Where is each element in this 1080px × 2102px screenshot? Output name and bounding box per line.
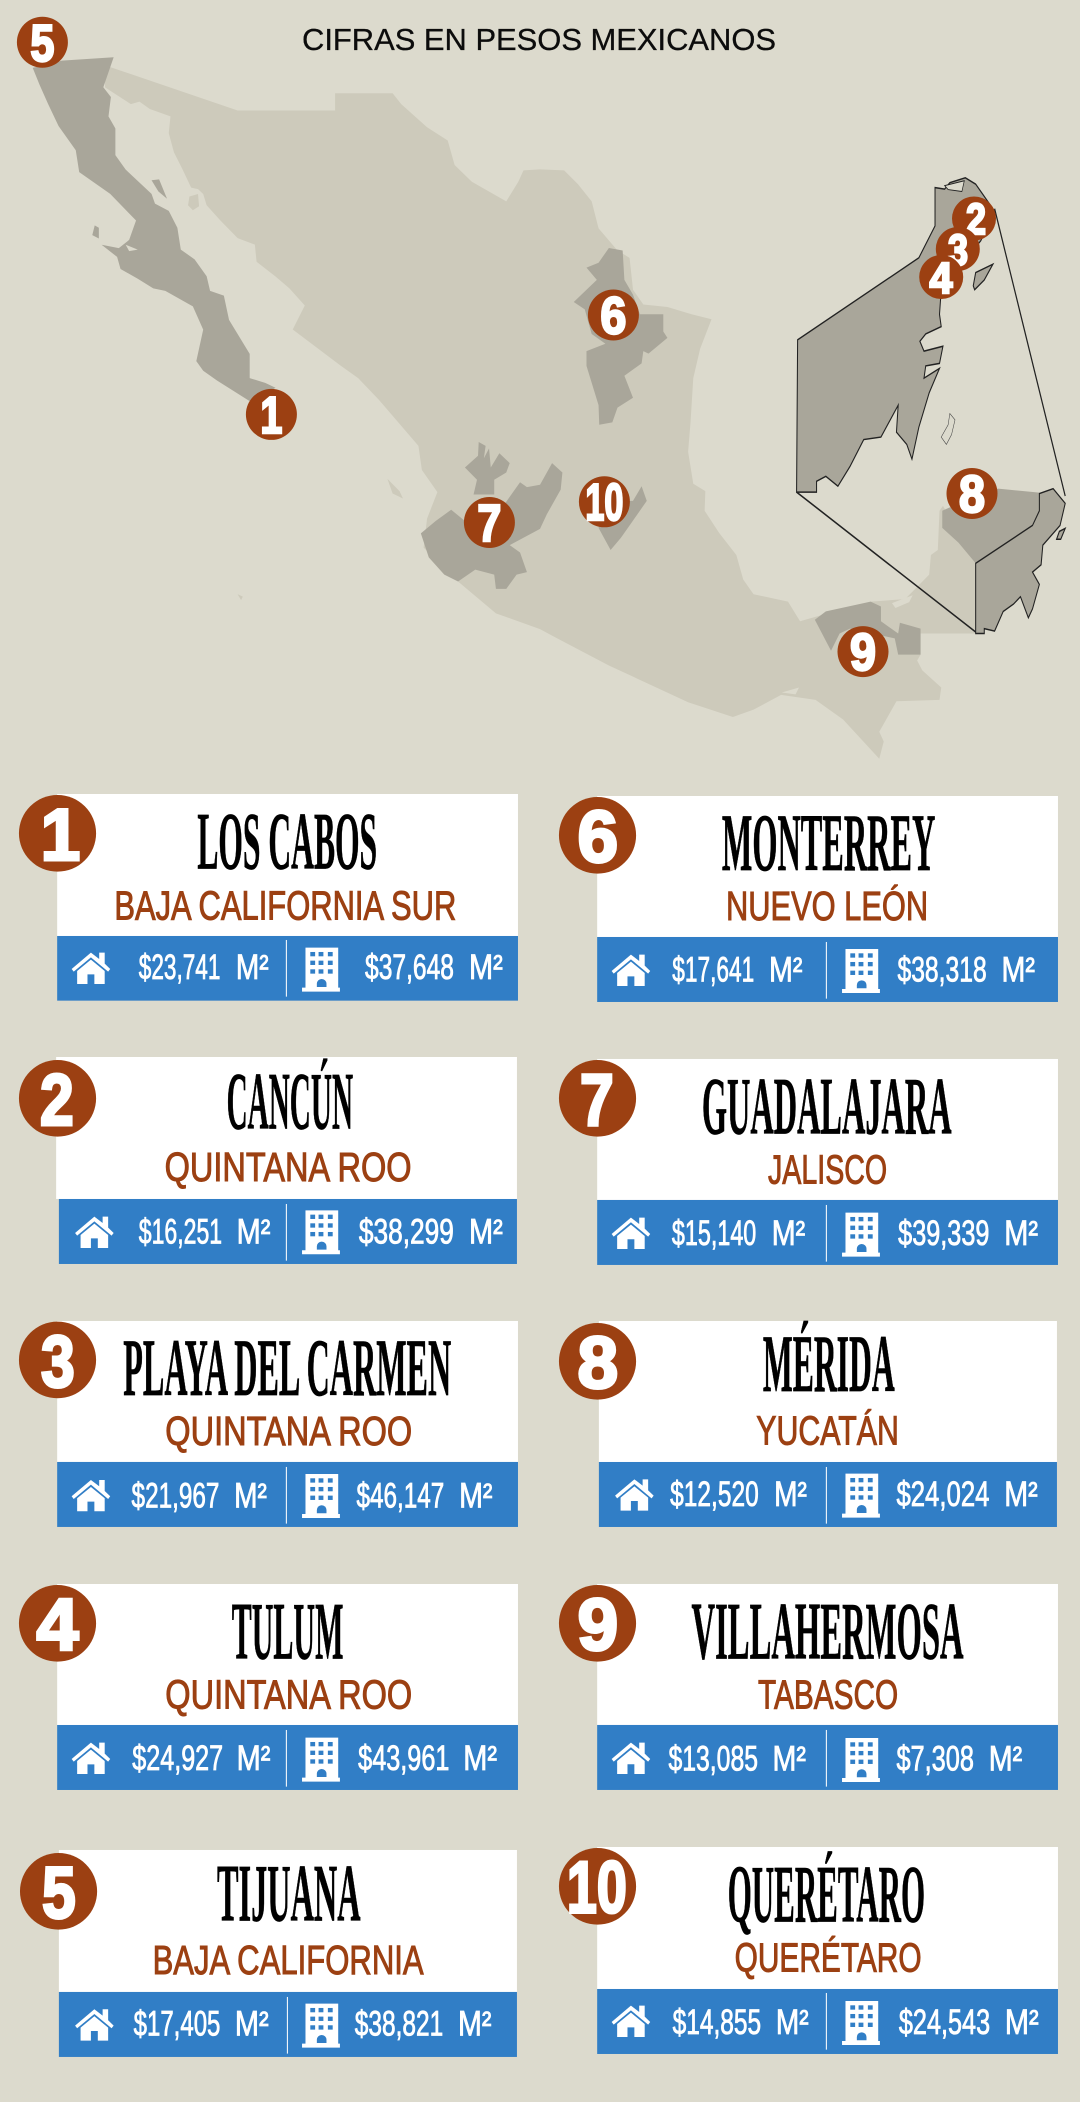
badge 2: [19, 1059, 96, 1141]
badge 7: 7: [580, 1059, 614, 1141]
icon: building: [302, 1210, 340, 1254]
badge 6: 6: [578, 796, 618, 878]
map marker 9: [838, 624, 888, 682]
badge 6: [559, 796, 636, 878]
map of Mexico: [17, 15, 1065, 759]
icon: building: [842, 2001, 880, 2045]
house price: $17,641: [672, 950, 754, 990]
price bar: M²: [1005, 2003, 1039, 2042]
badge 8: [559, 1322, 636, 1404]
state name: JALISCO: [768, 1147, 887, 1192]
price bar: M²: [235, 2004, 269, 2043]
price bar: [597, 937, 1058, 1002]
map marker 6: 6: [600, 288, 626, 346]
price bar: M²: [469, 948, 503, 987]
apartment price: $24,543: [899, 2003, 990, 2042]
house price: $21,967: [132, 1476, 219, 1515]
badge 8: 8: [578, 1322, 618, 1404]
map marker 2: [952, 195, 996, 244]
price bar: M²: [989, 1739, 1022, 1778]
mainland Mexico: [105, 65, 976, 759]
panel: Tijuana: TIJUANA: [217, 1848, 361, 1938]
price bar: M²: [237, 1739, 270, 1778]
badge 3: [19, 1321, 96, 1402]
map marker 9: 9: [850, 624, 876, 682]
price bar: M²: [772, 1739, 806, 1778]
price bar: [57, 1462, 518, 1527]
apartment price: $43,961: [358, 1739, 449, 1778]
house price: $15,140: [672, 1213, 756, 1253]
price bar: [59, 1992, 517, 2057]
icon: house: [612, 955, 650, 986]
icon: house: [72, 1743, 110, 1774]
state name: TABASCO: [758, 1672, 898, 1717]
map marker 10: 10: [585, 474, 623, 532]
price bar: M²: [237, 1212, 270, 1251]
text: PLAYA DEL CARMEN: [123, 1322, 451, 1413]
panel: Villahermosa: [559, 1584, 1058, 1790]
price bar: M²: [458, 2004, 492, 2043]
panel: Mérida: [559, 1318, 1057, 1527]
badge 10: 10: [567, 1846, 627, 1928]
apartment price: $38,821: [355, 2004, 443, 2043]
price bar: M²: [469, 1212, 503, 1251]
house price: $16,251: [139, 1212, 222, 1251]
icon: house: [75, 1217, 114, 1248]
price bar: [59, 1199, 517, 1264]
state name: QUERÉTARO: [735, 1935, 922, 1981]
map marker 4: 4: [930, 254, 953, 303]
price bar: [597, 1200, 1058, 1265]
state name: BAJA CALIFORNIA: [153, 1938, 424, 1983]
map marker 8: 8: [959, 466, 985, 524]
panel: Los Cabos: [19, 794, 518, 1001]
state name: YUCATÁN: [756, 1408, 899, 1453]
house price: $23,741: [139, 948, 220, 987]
badge 5: [20, 1852, 97, 1934]
badge 7: [559, 1059, 636, 1141]
Yucatan state: [942, 489, 1039, 563]
icon: building: [842, 1474, 880, 1518]
panel: Los Cabos: LOS CABOS: [197, 796, 377, 886]
house price: $24,927: [132, 1739, 223, 1778]
state name: QUINTANA ROO: [165, 1145, 412, 1190]
price bar: M²: [463, 1739, 497, 1778]
state name: NUEVO LEÓN: [726, 884, 928, 929]
panel: Tijuana: [20, 1848, 517, 2057]
icon: house: [75, 2009, 114, 2041]
house price: $17,405: [134, 2004, 220, 2043]
price bar: M²: [236, 948, 269, 987]
apartment price: $39,339: [898, 1213, 989, 1253]
house price: $13,085: [668, 1739, 758, 1778]
map marker 10: [579, 474, 630, 532]
price bar: M²: [234, 1476, 267, 1515]
badge 9: [559, 1584, 636, 1666]
house price: $12,520: [670, 1475, 759, 1514]
icon: house: [615, 1479, 654, 1511]
price bar: M²: [459, 1476, 493, 1515]
panel: Playa del Carmen: [19, 1321, 518, 1527]
Baja California highlighted: [33, 57, 276, 402]
state name: BAJA CALIFORNIA SUR: [114, 883, 456, 928]
icon: building: [302, 1738, 340, 1782]
apartment price: $37,648: [365, 948, 454, 987]
icon: house: [612, 1743, 650, 1774]
panel: Querétaro: [559, 1846, 1058, 2054]
map marker 6: [588, 288, 639, 346]
panel: Monterrey: [559, 796, 1058, 1002]
apartment price: $38,299: [359, 1212, 454, 1251]
panel: Guadalajara: [559, 1059, 1058, 1265]
badge 3: 3: [41, 1321, 75, 1402]
price bar: [599, 1462, 1057, 1527]
map marker 7: 7: [477, 495, 501, 553]
Jalisco highlighted: [421, 442, 562, 589]
map marker 8: [946, 466, 998, 524]
apartment price: $24,024: [896, 1475, 989, 1514]
connector lines: [797, 209, 1065, 632]
map marker 5: [17, 15, 68, 73]
price bar: M²: [772, 1213, 805, 1253]
panel: Tulum: [19, 1584, 518, 1790]
panel: Tulum: TULUM: [232, 1586, 343, 1676]
Cozumel island: [973, 264, 993, 290]
Quintana Roo enlarged: [797, 178, 995, 492]
badge 4: [19, 1584, 96, 1666]
icon: house: [72, 953, 110, 984]
state name: QUINTANA ROO: [165, 1409, 412, 1454]
badge 1: [19, 794, 96, 876]
icon: house: [612, 1218, 650, 1249]
price bar: [597, 1989, 1058, 2054]
price bar: M²: [776, 2003, 809, 2042]
icon: house: [72, 1480, 110, 1511]
Nuevo Leon, Queretaro and Tabasco highlighted: [574, 248, 921, 655]
price bar: [57, 1725, 518, 1790]
apartment price: $46,147: [356, 1476, 444, 1515]
icon: building: [302, 1474, 340, 1518]
price bar: [57, 936, 518, 1001]
state name: QUINTANA ROO: [165, 1672, 412, 1717]
price bar: M²: [769, 950, 803, 990]
map marker 3: 3: [948, 226, 968, 275]
Quintana Roo small: [976, 489, 1065, 634]
price bar: M²: [1004, 1213, 1038, 1253]
map marker 2: 2: [966, 195, 986, 244]
panel: Cancún: [19, 1056, 517, 1264]
map marker 7: [464, 495, 515, 553]
price bar: M²: [1004, 1475, 1038, 1514]
badge 9: 9: [578, 1584, 618, 1666]
price bar: M²: [774, 1475, 807, 1514]
badge 2: 2: [40, 1059, 74, 1141]
icon: building: [302, 2004, 340, 2048]
badge 5: 5: [42, 1852, 76, 1934]
badge 1: 1: [41, 794, 80, 876]
icon: building: [842, 1738, 880, 1782]
icon: building: [302, 948, 340, 992]
icon: house: [612, 2006, 650, 2037]
apartment price: $7,308: [896, 1739, 974, 1778]
Yucatan inset with connector lines: [797, 178, 1065, 634]
apartment price: $38,318: [897, 950, 987, 990]
badge 4: 4: [37, 1584, 79, 1666]
price bar: [597, 1725, 1058, 1790]
title: CIFRAS EN PESOS MEXICANOS: [302, 22, 776, 57]
price bar: M²: [1001, 950, 1035, 990]
map marker 4: [919, 254, 963, 303]
panel: Cancún: CANCÚN: [227, 1056, 353, 1146]
map marker 1: [246, 387, 297, 445]
map marker 1: 1: [260, 387, 282, 445]
icon: building: [842, 949, 880, 993]
icon: building: [842, 1213, 880, 1257]
map marker 5: 5: [30, 15, 54, 73]
house price: $14,855: [673, 2003, 761, 2042]
map marker 3: [936, 226, 980, 275]
